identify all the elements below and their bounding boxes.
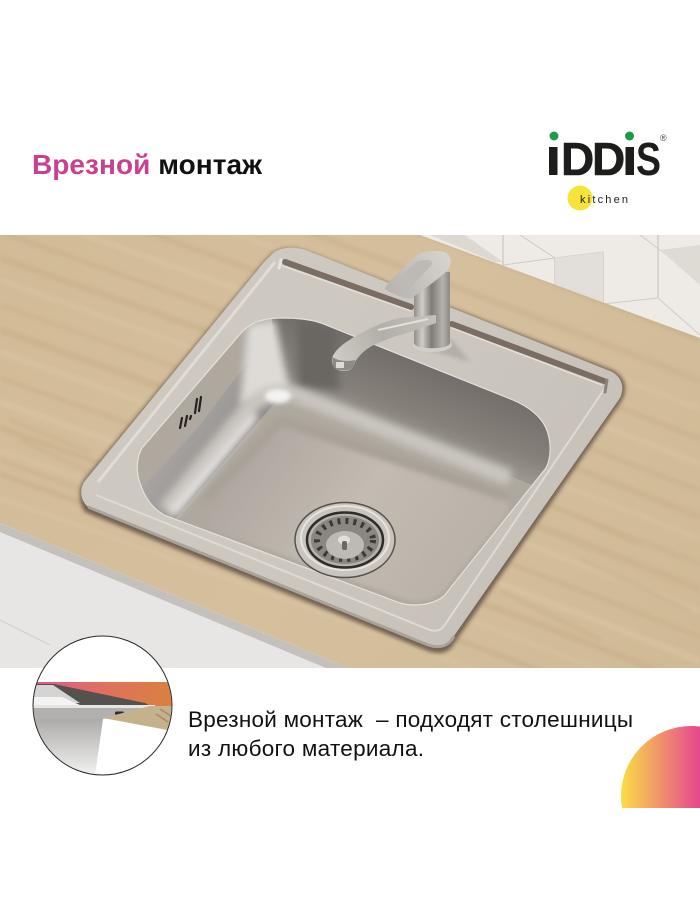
- logo: IDDIS kitchen: [549, 132, 667, 210]
- sink bowl: [138, 318, 550, 604]
- faucet: [332, 251, 470, 371]
- lower sink wall: [33, 719, 103, 776]
- logo: IDDIS kitchen: D: [561, 133, 594, 185]
- floor of bowl: [244, 442, 507, 600]
- overflow slots: [180, 397, 201, 428]
- inset detail circle: [33, 636, 173, 776]
- back wall: [272, 318, 550, 484]
- bowl rim line: [137, 318, 550, 605]
- faucet body: [414, 272, 450, 348]
- caption text: из любого материала.: [188, 736, 424, 761]
- rim strip: [33, 705, 155, 708]
- chipboard edge: [103, 706, 173, 731]
- faucet lever: [385, 251, 451, 298]
- kitchen sink photo: [0, 235, 700, 668]
- decorative gradient circle: [621, 726, 700, 808]
- logo: IDDIS kitchen: S: [636, 133, 661, 185]
- curved lower edge highlights: [165, 393, 510, 510]
- reflections on the back corner: [240, 320, 290, 405]
- spout tip: [332, 357, 355, 370]
- logo: IDDIS kitchen: D: [592, 133, 625, 185]
- wood countertop: [0, 235, 700, 668]
- faucet base: [412, 342, 452, 352]
- drain strainer: [295, 502, 395, 578]
- faucet spout: [332, 315, 436, 371]
- wall tiles: [415, 235, 700, 345]
- caption text: [188, 707, 633, 761]
- title: Врезной монтаж: [32, 149, 263, 180]
- cabinet front: [0, 523, 348, 668]
- left wall: [146, 370, 274, 518]
- sink rim wedge: [33, 684, 150, 706]
- logo: IDDIS kitchen: kitchen: [580, 194, 630, 206]
- faucet shadow: [434, 340, 468, 361]
- sink deck: [80, 248, 625, 653]
- logo: IDDIS kitchen: ®: [660, 133, 667, 143]
- caption text: Врезной монтаж – подходят столешницы: [188, 707, 633, 732]
- drainage channel: [279, 260, 607, 392]
- countertop layer: [33, 682, 173, 706]
